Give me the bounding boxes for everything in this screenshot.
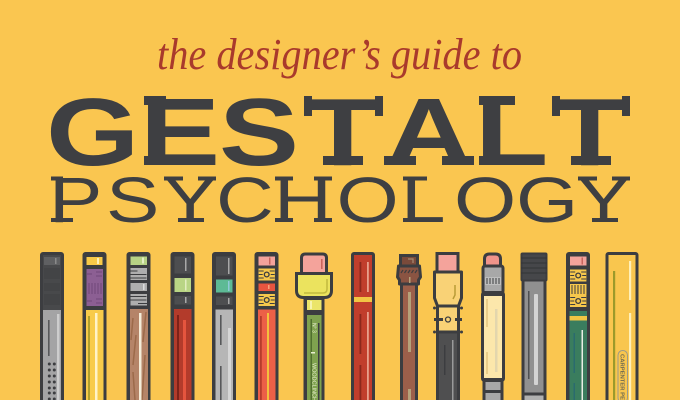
pencil 6: orange red with gears xyxy=(256,254,277,400)
pencil 7: green with yellow ferrule: N° 3 xyxy=(310,323,316,333)
pencil 10: dark with cream ferrule xyxy=(433,254,463,400)
pencil 12: grey with ribbed cap xyxy=(521,254,547,400)
pencil 1: grey with dots xyxy=(42,254,62,400)
pencil 5: teal and grey xyxy=(214,254,234,400)
pencil 7: green with yellow ferrule xyxy=(296,254,332,400)
title: psychology: PSYCHOLOGY xyxy=(49,165,630,236)
pencil 14: carpenter pencil xyxy=(607,254,637,400)
pencil 14: carpenter pencil: CARPENTER PE xyxy=(618,354,624,400)
pencil 4: red xyxy=(172,254,193,400)
pencil 2: yellow and purple xyxy=(84,254,105,400)
pencil 9: brown with flared cap xyxy=(398,256,420,400)
pencil 8: red with yellow band xyxy=(352,254,374,400)
pencil 13: green with gears xyxy=(568,254,588,400)
pencil 11: cream mechanical pen xyxy=(482,254,504,400)
title: gestalt: GESTALT xyxy=(46,79,626,186)
subtitle: the designer’s guide to xyxy=(157,30,522,79)
pencil 3: brown wood xyxy=(128,254,149,400)
pencil 7: green with yellow ferrule: WOODCLINCH xyxy=(310,363,316,400)
